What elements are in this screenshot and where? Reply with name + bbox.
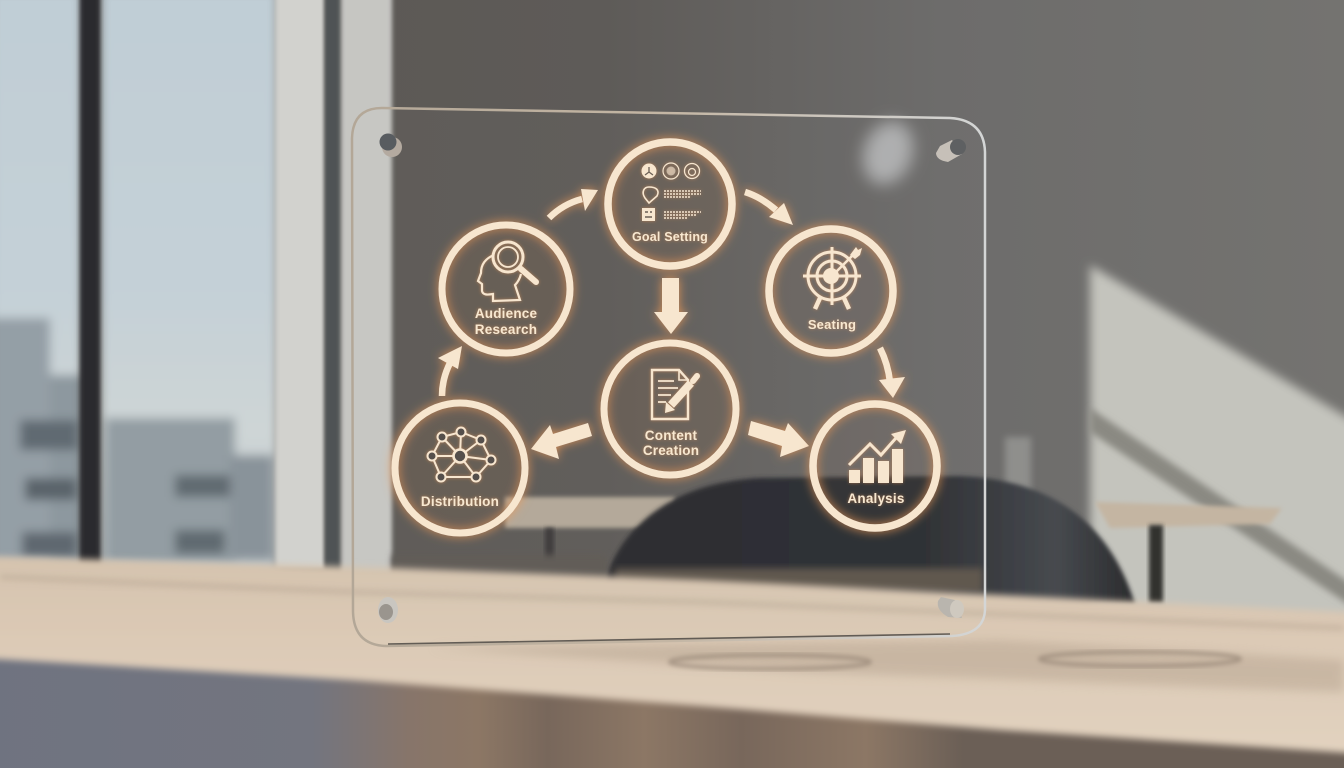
ring <box>395 403 525 533</box>
arrow: content creation to distribution <box>531 423 592 459</box>
label: Audience <box>475 306 537 321</box>
node: setting <box>769 229 893 353</box>
node: content creation <box>604 343 736 475</box>
ring <box>769 229 893 353</box>
label: Content <box>645 428 697 443</box>
label: Seating <box>808 317 856 332</box>
label line 2: Research <box>475 322 537 337</box>
icon: bar chart with rising arrow <box>849 430 906 483</box>
arrow: goal setting to setting <box>745 192 793 225</box>
arrow: distribution to audience research <box>438 346 462 396</box>
label: Distribution <box>421 494 499 509</box>
ring <box>442 225 570 353</box>
ring <box>813 404 937 528</box>
label line 2: Creation <box>643 443 699 458</box>
icon: goal checklist <box>642 163 701 221</box>
table <box>0 556 1344 768</box>
panel: clear acrylic sign <box>352 108 985 646</box>
screw: bottom right <box>938 597 964 618</box>
screw: bottom left <box>378 597 398 623</box>
screw: top right <box>936 139 966 162</box>
node: goal setting <box>608 142 732 266</box>
screw: top left <box>380 134 402 157</box>
icon: head with magnifying glass <box>478 242 536 301</box>
arrow: audience research to goal setting <box>549 189 598 218</box>
icon: network <box>428 428 496 482</box>
arrow: goal setting to content creation <box>654 278 688 334</box>
label: Analysis <box>847 491 905 506</box>
ring <box>608 142 732 266</box>
arrow: setting to analysis <box>879 348 905 398</box>
label: Goal Setting <box>632 230 708 244</box>
node: distribution <box>395 403 525 533</box>
process cycle diagram <box>395 142 937 533</box>
node: audience research <box>442 225 570 353</box>
ring <box>604 343 736 475</box>
icon: target with arrow <box>803 247 862 309</box>
icon: document with pen <box>652 370 697 419</box>
arrow: content creation to analysis <box>748 421 809 457</box>
node: analysis <box>813 404 937 528</box>
